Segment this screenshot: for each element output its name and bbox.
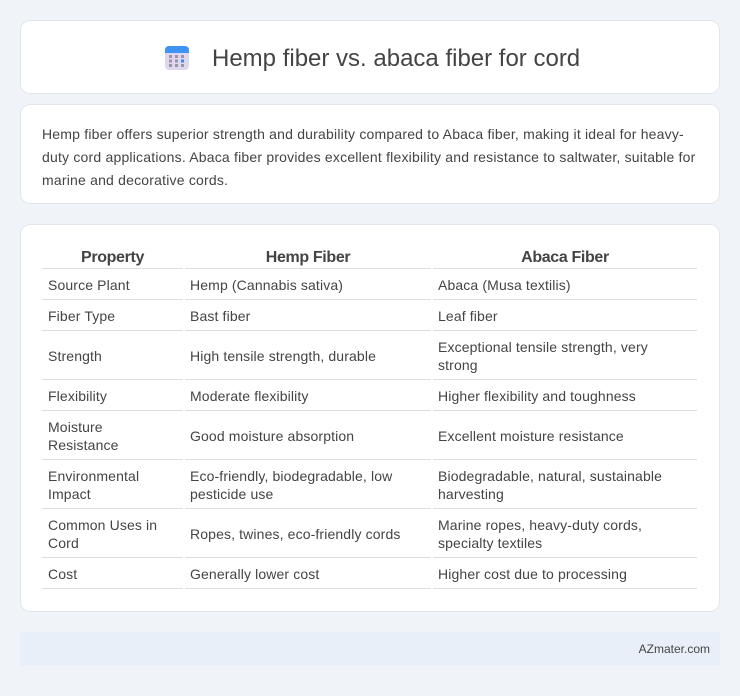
summary text: marine and decorative cords. — [42, 172, 228, 188]
row: common uses: Common Uses in — [48, 517, 157, 533]
comparison table: Generally lower cost — [190, 566, 319, 582]
comparison table: Biodegradable, natural, sustainable — [438, 468, 662, 484]
comparison table — [42, 249, 697, 589]
comparison table: Good moisture absorption — [190, 428, 354, 444]
row: source plant: Source Plant — [48, 277, 130, 293]
row: moisture resistance: Resistance — [48, 437, 119, 453]
header: property: Property — [81, 249, 144, 266]
row: common uses: Cord — [48, 535, 79, 551]
comparison table: Bast fiber — [190, 308, 250, 324]
row: common uses — [48, 517, 157, 551]
comparison table: harvesting — [438, 486, 504, 502]
row: fiber type: Fiber Type — [48, 308, 115, 324]
row: environmental impact: Environmental — [48, 468, 139, 484]
header: abaca fiber: Abaca Fiber — [521, 249, 609, 266]
comparison table: Hemp (Cannabis sativa) — [190, 277, 343, 293]
summary card — [20, 104, 720, 204]
footer credit: AZmater.com — [639, 642, 710, 656]
row: moisture resistance: Moisture — [48, 419, 103, 435]
row: environmental impact: Impact — [48, 486, 91, 502]
icon: calendar — [165, 46, 189, 70]
row: flexibility: Flexibility — [48, 388, 107, 404]
comparison table: Abaca (Musa textilis) — [438, 277, 571, 293]
comparison table: Moderate flexibility — [190, 388, 309, 404]
comparison table: Excellent moisture resistance — [438, 428, 624, 444]
comparison table: High tensile strength, durable — [190, 348, 376, 364]
summary text — [42, 126, 696, 188]
comparison table: Eco-friendly, biodegradable, low — [190, 468, 392, 484]
table card — [20, 224, 720, 612]
row: moisture resistance — [48, 419, 119, 453]
header: hemp fiber: Hemp Fiber — [266, 249, 350, 266]
comparison table: Exceptional tensile strength, very — [438, 339, 648, 355]
summary text: Hemp fiber offers superior strength and durability compared to Abaca fiber, making it ideal for heavy- — [42, 126, 684, 142]
footer bar — [20, 632, 720, 666]
comparison table: Marine ropes, heavy-duty cords, — [438, 517, 642, 533]
row: strength: Strength — [48, 348, 102, 364]
title card — [20, 20, 720, 94]
summary text: duty cord applications. Abaca fiber provides excellent flexibility and resistance to saltwater, suitable for — [42, 149, 696, 165]
row: cost: Cost — [48, 566, 77, 582]
comparison table: Higher flexibility and toughness — [438, 388, 636, 404]
comparison table: specialty textiles — [438, 535, 542, 551]
comparison table: pesticide use — [190, 486, 273, 502]
row: environmental impact — [48, 468, 139, 502]
comparison table: strong — [438, 357, 478, 373]
title: Hemp fiber vs. abaca fiber for cord — [212, 45, 580, 72]
comparison table: Ropes, twines, eco-friendly cords — [190, 526, 400, 542]
comparison table: Leaf fiber — [438, 308, 498, 324]
comparison table: Higher cost due to processing — [438, 566, 627, 582]
